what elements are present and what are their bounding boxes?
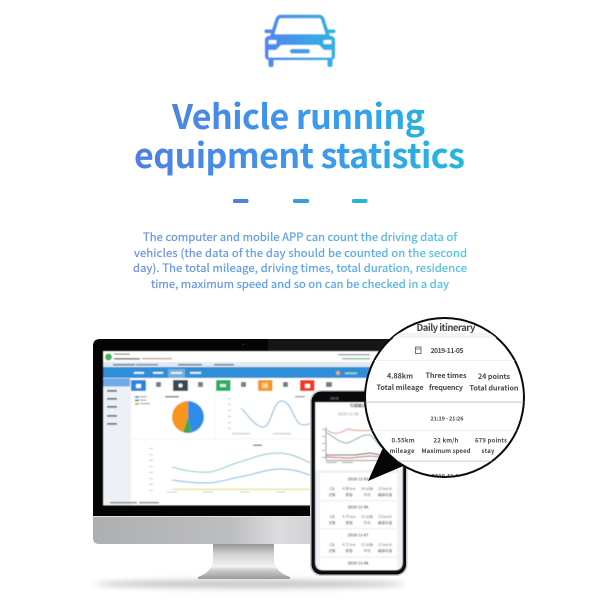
phone chart xyxy=(322,427,395,463)
magnifier daily totals: Total duration xyxy=(470,384,519,394)
phone itinerary cards: 平均 xyxy=(363,548,371,554)
magnifier trip stats: mileage xyxy=(390,446,415,455)
magnifier content xyxy=(365,320,525,480)
title xyxy=(134,90,465,178)
phone itinerary cards: 2019-11-06 xyxy=(348,506,369,510)
desk shadow xyxy=(95,580,405,588)
monitor stand xyxy=(198,543,290,579)
magnifier trip stats: 0.55km xyxy=(392,436,415,444)
monitor xyxy=(93,339,400,579)
line chart bottom xyxy=(110,444,318,503)
phone itinerary cards: 15 分钟 xyxy=(361,542,373,548)
phone itinerary cards: 次数 xyxy=(328,548,336,554)
magnifier trip stats: 679 points xyxy=(475,436,507,444)
phone itinerary cards: 最高时速 xyxy=(378,520,393,526)
phone itinerary cards: 次数 xyxy=(328,492,336,498)
monitor body xyxy=(93,516,400,544)
phone screen: 行程统计 xyxy=(350,402,366,409)
phone itinerary cards: 21 km/h xyxy=(378,543,392,548)
calendar icon xyxy=(416,347,421,354)
title divider dashes xyxy=(233,199,368,203)
phone itinerary cards: 22 km/h xyxy=(378,487,392,492)
pie chart xyxy=(132,392,340,439)
magnifier callout xyxy=(365,318,525,480)
magnifier trip stats: Maximum speed xyxy=(422,446,471,455)
magnifier daily totals: 4.88km xyxy=(387,372,413,382)
title: Vehicle running xyxy=(171,90,425,139)
phone itinerary cards: 里程 xyxy=(345,520,353,526)
description paragraph: day). The total mileage, driving times, total duration, residence xyxy=(133,260,467,276)
phone itinerary cards: 2次 xyxy=(329,514,335,520)
phone itinerary cards: 4.71 km xyxy=(342,543,356,548)
phone screen: 18:32 xyxy=(330,396,339,402)
phone itinerary cards: 2次 xyxy=(329,542,335,548)
magnifier trip stats xyxy=(390,438,507,454)
toolbar icons xyxy=(131,380,332,391)
phone itinerary cards: 4.75 km xyxy=(342,515,356,520)
phone itinerary cards: 2019-11-08 xyxy=(348,562,369,566)
line chart top xyxy=(228,396,316,434)
phone itinerary cards: 平均 xyxy=(363,520,371,526)
phone screen: 2019-11-05 xyxy=(338,412,359,418)
phone itinerary cards: 里程 xyxy=(345,548,353,554)
magnifier callout pointer xyxy=(368,441,408,481)
phone xyxy=(310,390,408,576)
phone itinerary cards xyxy=(320,473,397,570)
phone itinerary cards: 2019-11-05 xyxy=(348,478,369,482)
navigation bar xyxy=(103,367,400,378)
magnifier content: 2019-11-06 xyxy=(432,472,463,480)
magnifier daily totals xyxy=(376,372,518,392)
phone itinerary cards: 4.88 km xyxy=(342,487,356,492)
phone itinerary cards: 最高时速 xyxy=(378,548,393,554)
phone itinerary cards: 次数 xyxy=(328,520,336,526)
magnifier date: 2019-11-05 xyxy=(430,345,464,355)
phone screen xyxy=(315,396,403,570)
phone itinerary cards: 2次 xyxy=(329,486,335,492)
magnifier heading: Daily itinerary xyxy=(416,320,476,334)
magnifier time range: 21:19 - 21:26 xyxy=(430,414,464,422)
phone itinerary cards: 13 分钟 xyxy=(361,514,373,520)
magnifier daily totals: Total mileage xyxy=(376,383,424,393)
phone itinerary cards: 平均 xyxy=(363,492,371,498)
phone itinerary cards: 最高时速 xyxy=(378,492,393,498)
phone itinerary cards: 23 km/h xyxy=(378,515,392,520)
description paragraph: vehicles (the data of the day should be counted on the second xyxy=(134,245,467,261)
icon: car xyxy=(264,16,336,67)
magnifier trip stats: 22 km/h xyxy=(434,436,459,444)
description paragraph xyxy=(133,229,467,292)
magnifier trip stats: stay xyxy=(482,446,495,455)
description paragraph: time, maximum speed and so on can be checked in a day xyxy=(151,276,449,292)
description paragraph: The computer and mobile APP can count the driving data of xyxy=(143,229,457,245)
title: equipment statistics xyxy=(134,129,465,178)
sidebar xyxy=(103,378,131,505)
magnifier daily totals: Three times xyxy=(426,371,467,381)
monitor screen dashboard xyxy=(103,351,400,506)
magnifier daily totals: frequency xyxy=(429,383,464,393)
phone itinerary cards: 里程 xyxy=(345,492,353,498)
phone itinerary cards: 14 分钟 xyxy=(361,486,373,492)
browser bar xyxy=(103,354,400,367)
phone itinerary cards: 2019-11-07 xyxy=(348,534,369,538)
magnifier daily totals: 24 points xyxy=(478,372,510,382)
